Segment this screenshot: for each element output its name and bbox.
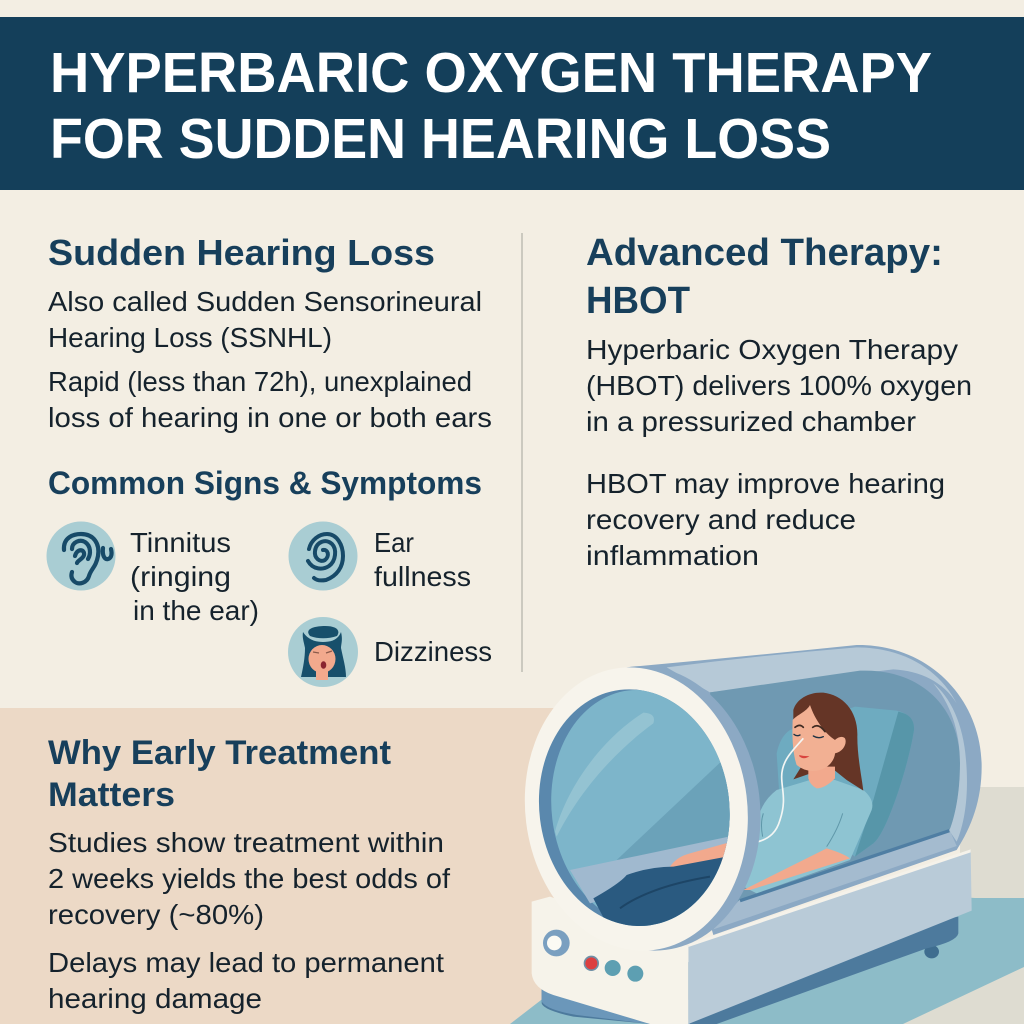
control panel — [543, 930, 643, 982]
heading: why early treatment matters: Why Early Treatment — [48, 734, 391, 772]
chamber base — [532, 850, 972, 1024]
rim behind ring — [520, 653, 777, 964]
label: dizziness: Dizziness — [374, 636, 492, 667]
teal button — [605, 960, 621, 976]
text: definition: Hearing Loss (SSNHL) — [48, 322, 332, 353]
title: HYPERBARIC OXYGEN THERAPY — [50, 41, 932, 105]
panel: advanced therapy — [586, 232, 972, 571]
text: definition — [48, 286, 492, 433]
heading: advanced therapy hbot — [586, 232, 943, 322]
header banner — [0, 17, 1024, 190]
arm — [743, 848, 850, 890]
icon: spiral ear — [288, 522, 358, 590]
dial — [543, 930, 570, 956]
torso — [743, 780, 872, 893]
heading: advanced therapy hbot: HBOT — [586, 280, 690, 322]
text: hbot benefits: HBOT may improve hearing — [586, 468, 945, 499]
patient — [740, 693, 949, 901]
icon: dizzy face — [288, 617, 358, 687]
text: treatment window — [48, 827, 450, 930]
label: ear fullness: Ear — [374, 527, 414, 558]
white ring — [509, 655, 764, 963]
heading: why early treatment matters — [48, 734, 391, 814]
text: delay warning: Delays may lead to permanent — [48, 947, 444, 978]
text: delay warning: hearing damage — [48, 983, 262, 1014]
text: definition: Also called Sudden Sensorineural — [48, 286, 482, 317]
panel: sudden hearing loss — [48, 232, 492, 433]
text: hbot description: in a pressurized chamber — [586, 406, 916, 437]
window edge — [526, 678, 743, 937]
heading: why early treatment matters: Matters — [48, 776, 175, 814]
window lower edge — [740, 831, 949, 901]
text: hbot description: (HBOT) delivers 100% oxygen — [586, 370, 972, 401]
label: tinnitus: in the ear) — [133, 595, 259, 626]
heading: common signs and symptoms: Common Signs & Symptoms — [48, 465, 482, 501]
label: ear fullness — [374, 527, 471, 592]
title: FOR SUDDEN HEARING LOSS — [50, 107, 831, 171]
text: definition: Rapid (less than 72h), unexplained — [48, 366, 472, 397]
label: tinnitus — [130, 527, 259, 626]
text: treatment window: 2 weeks yields the best odds of — [48, 863, 450, 894]
text: delay warning — [48, 947, 444, 1014]
text: hbot benefits: recovery and reduce — [586, 504, 856, 535]
red button — [584, 956, 599, 971]
hair — [793, 693, 863, 791]
text: definition: loss of hearing in one or both ears — [48, 402, 492, 433]
label: tinnitus: Tinnitus — [130, 527, 231, 558]
text: hbot benefits — [586, 468, 945, 571]
icon: ear with ringing — [46, 522, 116, 590]
oxygen tube — [758, 738, 803, 842]
text: hbot description — [586, 334, 972, 437]
chamber tube — [633, 645, 982, 947]
teal button — [627, 966, 643, 982]
text: treatment window: recovery (~80%) — [48, 899, 264, 930]
neck — [808, 767, 835, 788]
text: hbot description: Hyperbaric Oxygen Therapy — [586, 334, 958, 365]
panel: why early treatment matters — [0, 708, 570, 1024]
title — [50, 41, 932, 171]
label: tinnitus: (ringing — [130, 561, 231, 592]
room background: wall and floor — [510, 787, 1024, 1024]
text: hbot benefits: inflammation — [586, 540, 759, 571]
label: ear fullness: fullness — [374, 561, 471, 592]
heading: advanced therapy hbot: Advanced Therapy: — [586, 232, 943, 274]
face — [792, 705, 846, 771]
illustration: hyperbaric chamber — [509, 645, 982, 1024]
text: treatment window: Studies show treatment within — [48, 827, 444, 858]
panel: signs and symptoms — [46, 465, 492, 687]
heading: sudden hearing loss: Sudden Hearing Loss — [48, 232, 435, 273]
window glass view — [551, 690, 730, 926]
pillow — [777, 707, 914, 857]
